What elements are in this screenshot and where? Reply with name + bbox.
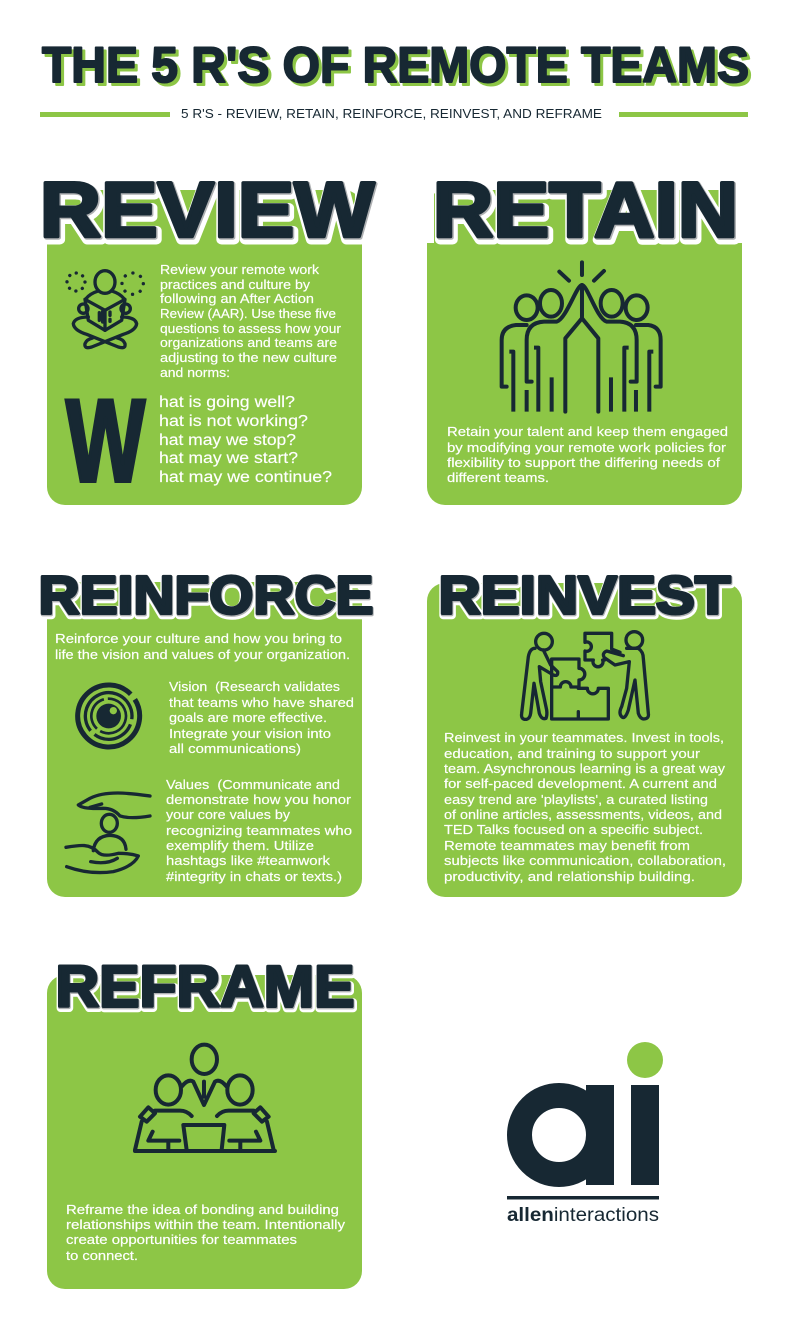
text: vision: Integrate your vision into <box>169 726 331 741</box>
text: vision: Vision (Research validates <box>169 679 341 694</box>
icon: hands holding person <box>66 793 150 873</box>
icon: team high five <box>502 262 661 412</box>
text: reframe: Reframe the idea of bonding and building <box>66 1202 339 1217</box>
text: values: exemplify them. Utilize <box>166 838 314 853</box>
text: reinforce intro: Reinforce your culture and how you bring to <box>55 631 342 646</box>
text: values: demonstrate how you honor <box>166 792 352 807</box>
text: reinvest: of online articles, assessments, videos, and <box>444 807 722 822</box>
text: reinvest: Reinvest in your teammates. Invest in tools, <box>444 730 724 745</box>
text: review intro: adjusting to the new culture <box>160 350 337 365</box>
text: what questions: hat may we continue? <box>159 469 332 486</box>
text: reinvest: team. Asynchronous learning is a great way <box>444 761 726 776</box>
heading: reframe: REFRAME <box>56 954 354 1020</box>
text: retain <box>447 424 728 485</box>
text: review intro: Review your remote work <box>160 262 320 277</box>
text: review intro: questions to assess how your <box>160 321 342 336</box>
text: reframe: relationships within the team. Intentionally <box>66 1217 346 1232</box>
text: what questions <box>159 394 332 486</box>
icon: meeting at table <box>135 1045 275 1151</box>
icon: person reading <box>67 271 143 348</box>
text: what questions: hat is not working? <box>159 413 308 430</box>
heading: reinforce: REINFORCE <box>38 566 373 626</box>
text: review intro: and norms: <box>160 365 230 380</box>
letter W: W <box>66 375 145 506</box>
text: reframe: create opportunities for teammates <box>66 1232 298 1247</box>
text: values: #integrity in chats or texts.) <box>166 869 342 884</box>
text: values: hashtags like #teamwork <box>166 853 331 868</box>
text: reframe: to connect. <box>66 1248 138 1263</box>
title: THE 5 R'S OF REMOTE TEAMS <box>45 40 752 96</box>
heading: review: REVIEW <box>41 166 376 254</box>
heading: review: REVIEW <box>42 168 377 256</box>
text: retain: different teams. <box>447 470 549 485</box>
logo: allen interactions <box>507 1042 663 1226</box>
text: reinforce intro: life the vision and values of your organization. <box>55 647 350 662</box>
text: review intro <box>160 262 342 380</box>
subtitle with rules: 5 R'S - REVIEW, RETAIN, REINFORCE, REINVEST, AND REFRAME <box>181 106 602 121</box>
text: retain: by modifying your remote work policies for <box>447 440 727 455</box>
text: review intro: practices and culture by <box>160 277 311 292</box>
text: vision: that teams who have shared <box>169 695 354 710</box>
text: review intro: Review (AAR). Use these five <box>160 306 336 321</box>
text: vision: all communications) <box>169 741 301 756</box>
text: reinvest: education, and training to support your <box>444 746 701 761</box>
heading: reinvest: REINVEST <box>439 566 731 626</box>
text: reinvest: subjects like communication, collaboration, <box>444 853 726 868</box>
panel: reinforce <box>38 566 374 897</box>
heading: reinforce: REINFORCE <box>40 568 374 628</box>
panel: reframe <box>47 954 362 1289</box>
logo: allen interactions: alleninteractions <box>507 1205 659 1226</box>
text: what questions: hat may we start? <box>159 450 298 467</box>
text: reinvest: easy trend are 'playlists', a curated listing <box>444 792 708 807</box>
panel: retain <box>424 165 745 505</box>
text: values: Values (Communicate and <box>166 777 340 792</box>
heading: reframe: REFRAME <box>56 956 355 1020</box>
heading: reinforce: REINFORCE <box>39 566 374 626</box>
text: values <box>166 777 352 884</box>
text: review intro: organizations and teams are <box>160 335 337 350</box>
panel: review <box>40 165 377 506</box>
text: reinforce intro <box>55 631 350 662</box>
title: THE 5 R'S OF REMOTE TEAMS <box>42 37 749 93</box>
icon: people assembling puzzle <box>522 632 648 719</box>
text: vision <box>169 679 354 756</box>
heading: review: REVIEW <box>40 165 375 253</box>
text: what questions: hat is going well? <box>159 394 295 411</box>
text: values: recognizing teammates who <box>166 823 352 838</box>
heading: reinvest: REINVEST <box>440 568 732 628</box>
heading: retain: RETAIN <box>433 165 738 253</box>
heading: reframe: REFRAME <box>56 956 356 1022</box>
icon: eye target <box>65 672 152 760</box>
text: retain: Retain your talent and keep them engaged <box>447 424 728 439</box>
heading: retain: RETAIN <box>434 166 739 254</box>
text: reinvest: TED Talks focused on a specific subject. <box>444 822 703 837</box>
text: reinvest: Remote teammates may benefit from <box>444 838 690 853</box>
text: values: your core values by <box>166 807 291 822</box>
heading: retain: RETAIN <box>435 168 740 256</box>
text: reframe <box>66 1202 346 1263</box>
text: retain: flexibility to support the differing needs of <box>447 455 720 470</box>
text: vision: goals are more effective. <box>169 710 327 725</box>
panel: reinvest <box>427 566 742 897</box>
text: review intro: following an After Action <box>160 291 314 306</box>
subtitle with rules <box>40 106 748 121</box>
text: reinvest: for self-paced development. A current and <box>444 776 717 791</box>
text: reinvest <box>444 730 726 884</box>
text: reinvest: productivity, and relationship building. <box>444 869 695 884</box>
heading: reinvest: REINVEST <box>438 566 731 626</box>
text: what questions: hat may we stop? <box>159 432 296 449</box>
